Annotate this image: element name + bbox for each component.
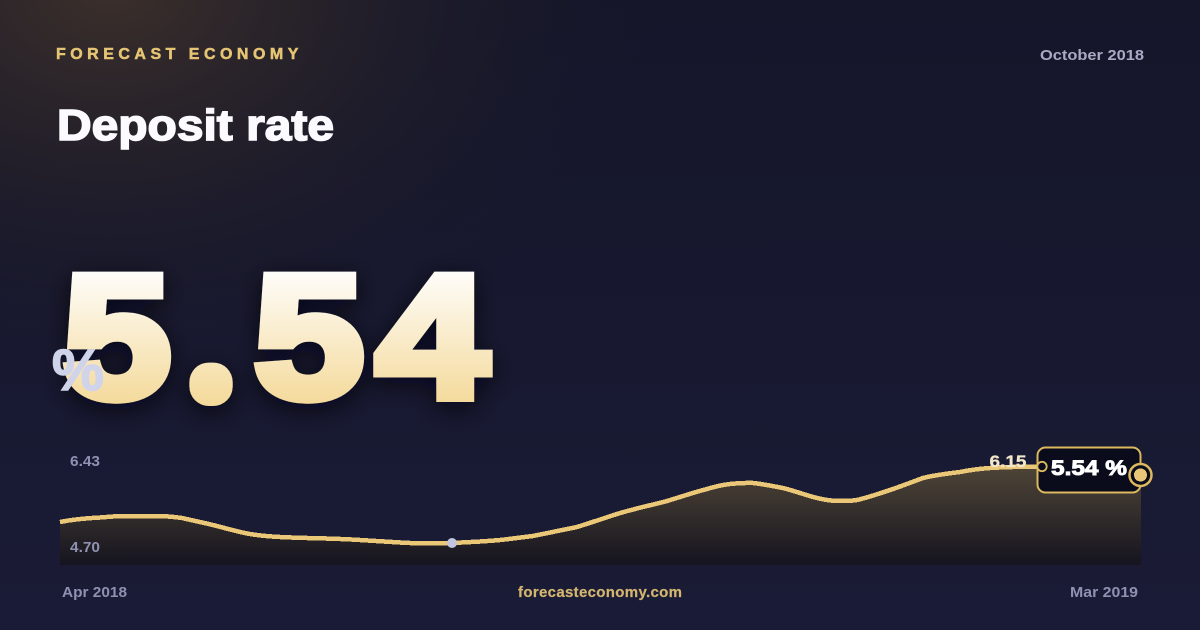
- chart line: [60, 466, 1040, 543]
- title: Deposit rate: [57, 101, 334, 150]
- start date label: Apr 2018: [62, 584, 127, 601]
- end date label: Mar 2019: [1070, 584, 1138, 601]
- date label: October 2018: [1040, 47, 1144, 64]
- current value callout: 5.54 %: [1051, 457, 1127, 480]
- axis max label: 6.43: [70, 454, 100, 470]
- low point marker: [447, 538, 457, 548]
- big value: 5: [63, 240, 171, 435]
- brand label: FORECAST ECONOMY: [56, 46, 303, 63]
- chart area fill: [60, 466, 1141, 565]
- current point marker: [1130, 464, 1152, 486]
- big value: .: [207, 361, 215, 394]
- big value: 5: [254, 240, 364, 435]
- big value: 4: [376, 240, 488, 435]
- big value: [63, 240, 488, 435]
- current value callout: [1038, 448, 1140, 492]
- high value label: 6.15: [990, 453, 1026, 471]
- axis min label: 4.70: [70, 540, 100, 556]
- peak marker: [1037, 462, 1047, 471]
- website label: forecasteconomy.com: [518, 584, 682, 601]
- area chart: [60, 466, 1141, 565]
- percent sign: %: [52, 338, 104, 403]
